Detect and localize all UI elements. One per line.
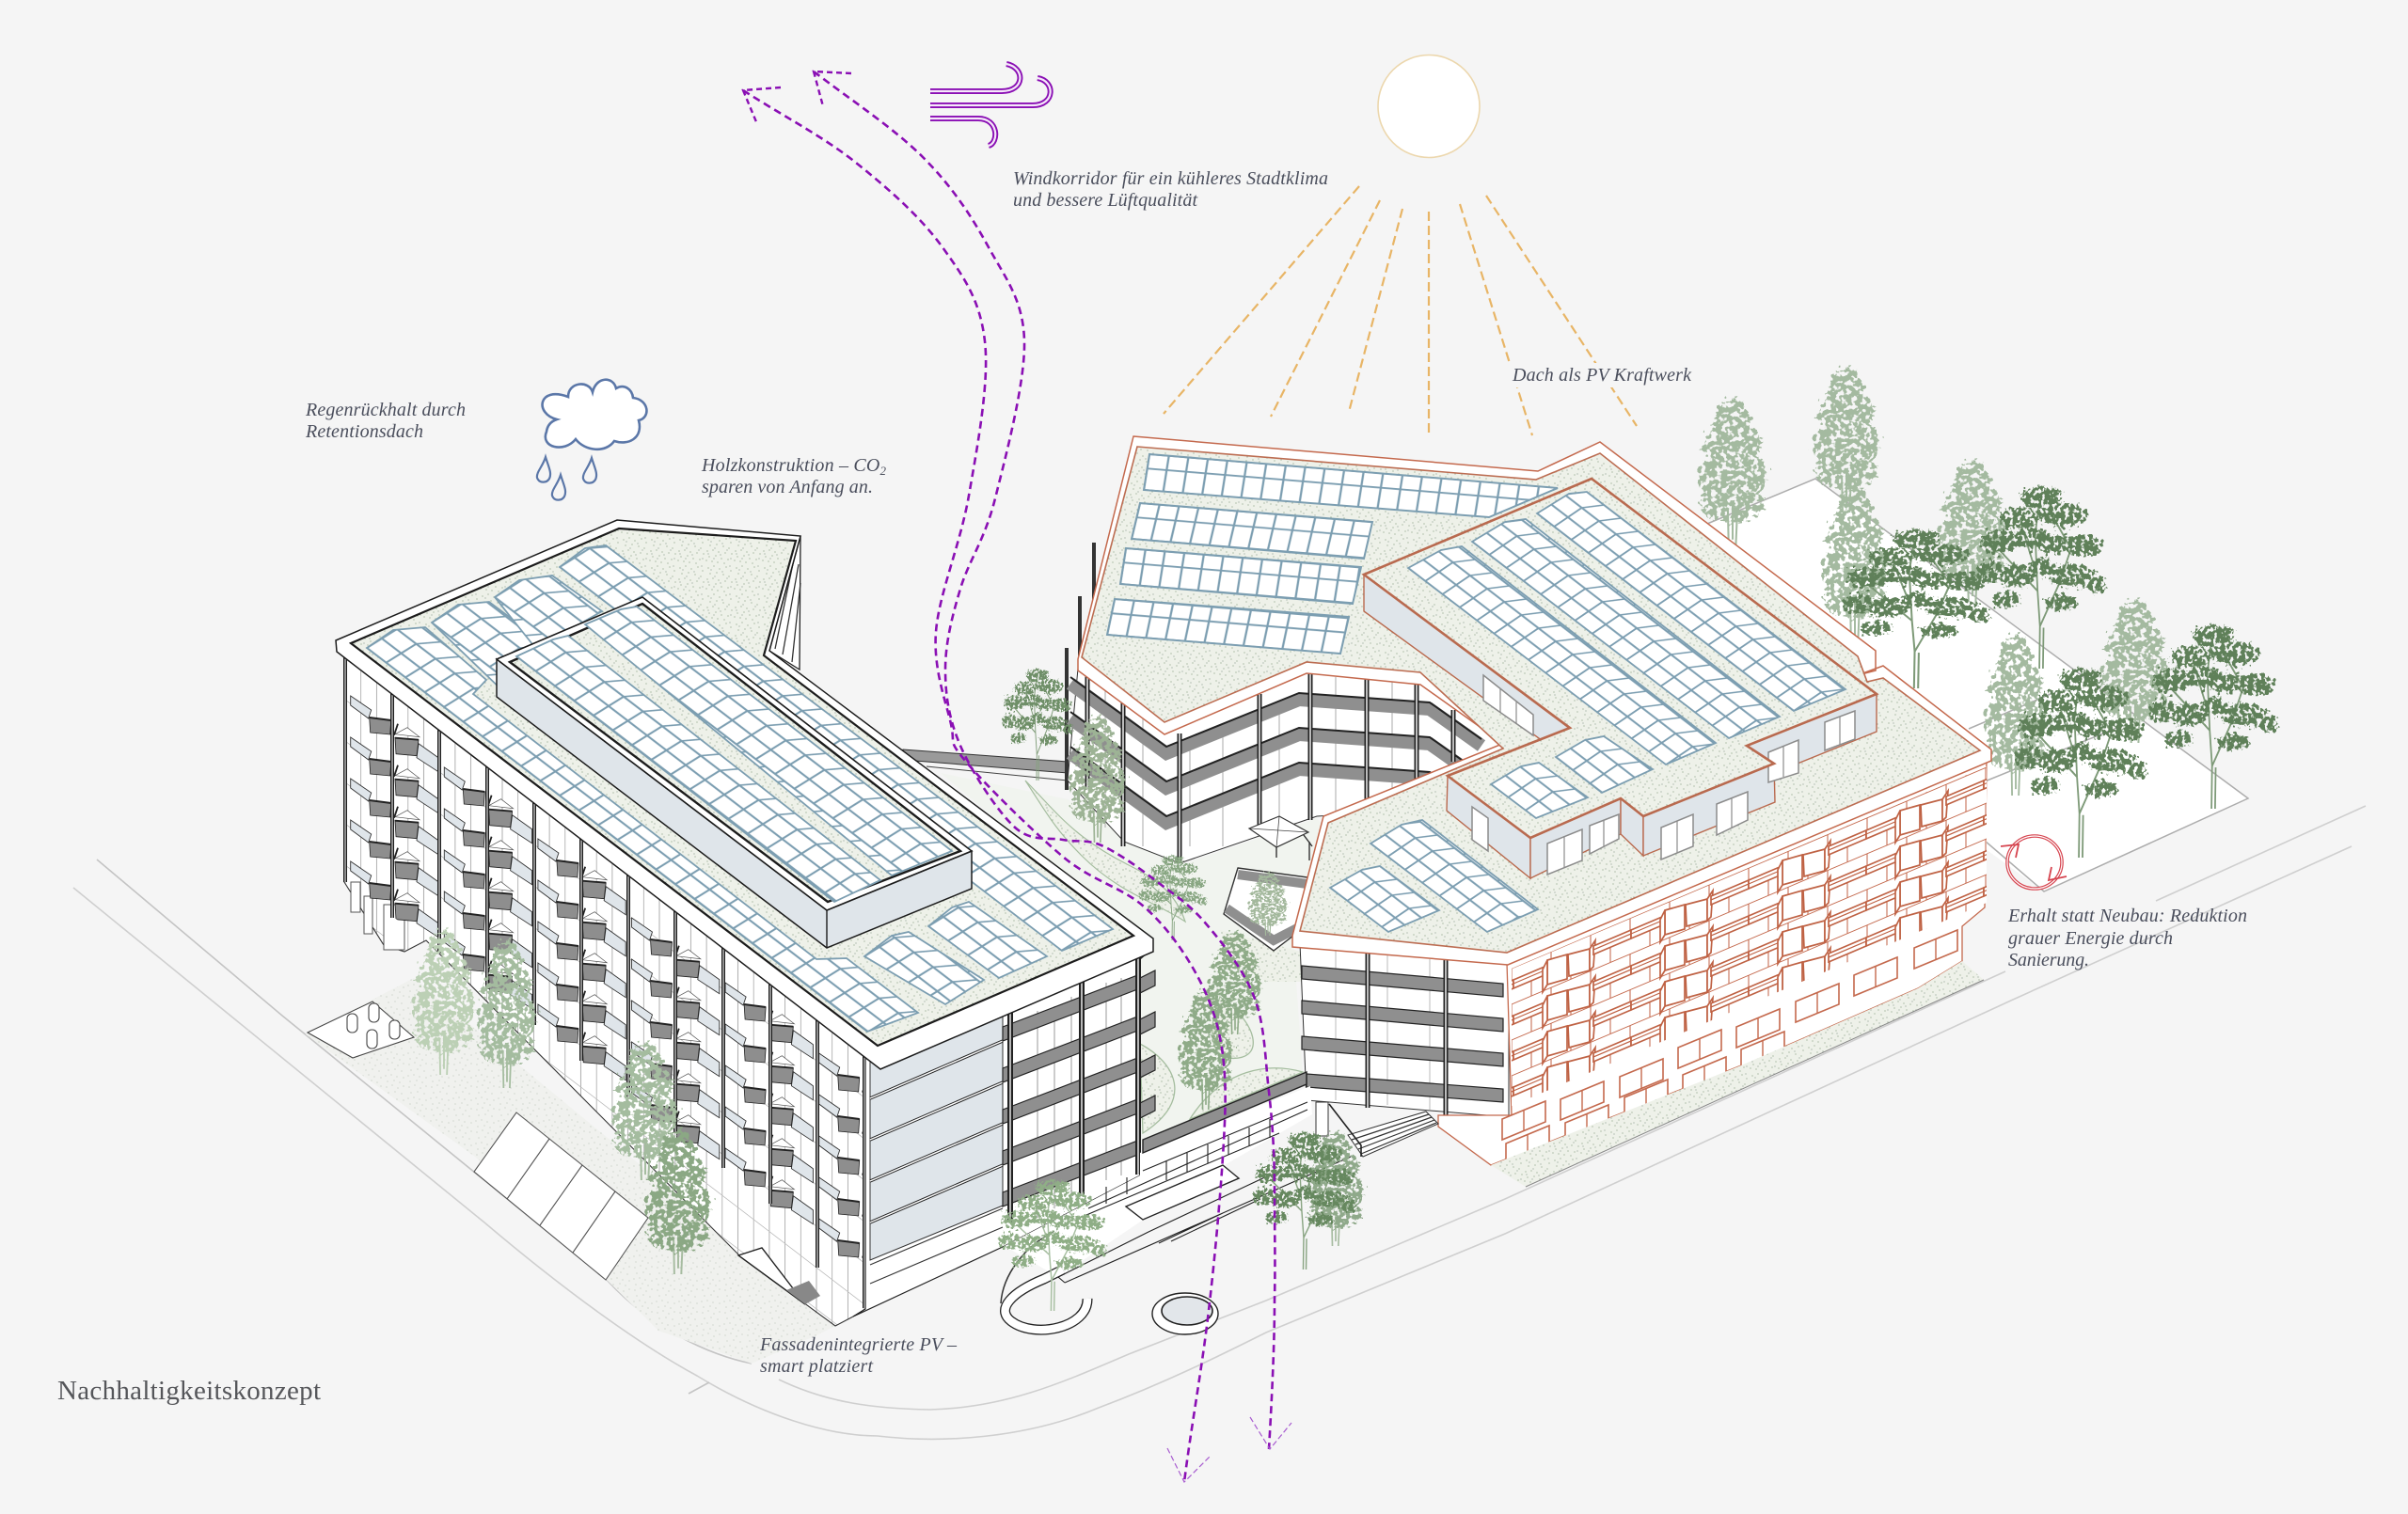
bin pad [308,1001,414,1058]
long southwest facade [344,651,865,1326]
label: facade PV: Fassadenintegrierte PV – [759,1334,958,1355]
courtyard facade [1068,662,1505,863]
courtyard ground and planting beds [941,773,1324,1145]
red facade [1438,757,1987,1165]
sun rays [1164,186,1637,437]
patio umbrella [1249,816,1312,860]
courtyard trees [1001,669,1262,1110]
roof slab outline [1078,436,1991,965]
pilotis [351,882,404,950]
penthouse windows [1472,675,1855,875]
connecting bridge [903,749,1068,781]
label: facade PV: smart platziert [760,1356,873,1377]
foreground trees [412,929,1365,1311]
penthouse roof [1364,479,1877,838]
label: rain retention [305,400,466,442]
parking bays [474,1112,648,1280]
icon: recycling circle [2001,836,2067,889]
label: retained building [2007,906,2247,970]
green roof surface [351,528,1133,1046]
terrace wall, ramps and stairs [1005,1072,1438,1283]
site plot behind the existing building [1707,479,2248,891]
retained building roof [1078,436,1991,965]
balconies [350,695,863,1258]
red windows [1502,930,1957,1164]
window mullions [1038,978,1121,1218]
title: Nachhaltigkeitskonzept [57,1376,321,1406]
courtyard poles [1087,658,1453,863]
label: rain retention: Regenrückhalt durch [305,400,466,420]
left site ground with parking and bins [306,978,835,1364]
roof slab [336,520,1153,1069]
back poles [1067,543,1094,790]
roof PV arrays [367,545,1113,1032]
icon: sun [1378,55,1480,158]
ground floor block [1300,943,1509,1117]
existing building facade and courtyard block [1067,543,2037,1187]
penthouse PV arrays [1330,492,1846,932]
rooftop block walls [497,659,972,948]
arrowheads [743,71,851,124]
label: wind corridor: und bessere Lüftqualität [1013,190,1197,211]
curved planter and round basin [1001,1232,1218,1334]
balcony bands [1070,684,1481,823]
label: retained building: grauer Energie durch [2008,928,2173,949]
label: retained building: Sanierung. [2008,950,2089,970]
wind path east [814,71,1275,1449]
trees behind right building [1698,367,2278,858]
label: timber construction [701,455,886,497]
icon: wind [930,64,1051,146]
label: timber construction: sparen von Anfang an. [702,477,873,497]
southeast facade PV panels [870,1002,1003,1260]
icon: rain cloud [537,380,646,500]
notch wall [769,536,800,670]
new timber building [336,520,1155,1326]
entrance [738,1248,820,1304]
speckled strip in front [1491,961,1984,1187]
street lines [73,806,2366,1439]
label: timber construction: 2 [880,464,886,478]
penthouse walls [1364,575,1877,878]
label: timber construction: Holzkonstruktion – CO [702,455,879,476]
rain drops [537,457,596,500]
red balconies [1450,755,2037,1133]
label: wind corridor [1013,168,1328,211]
planter with courtyard tree [1224,868,1307,951]
north wing PV arrays [1107,454,1558,654]
balcony strips [1003,970,1155,1206]
label: retained building: Erhalt statt Neubau: Reduktion [2007,906,2247,926]
facade columns [345,656,864,1308]
rooftop block top [497,597,972,910]
wind path west [743,90,1226,1482]
stairs [1348,1112,1438,1157]
label: PV roof: Dach als PV Kraftwerk [1512,365,1692,386]
label: rain retention: Retentionsdach [305,421,423,442]
label: wind corridor: Windkorridor für ein kühleres Stadtklima [1013,168,1328,189]
rooftop block PV arrays [516,607,952,902]
wind corridor arrows [743,71,1291,1482]
label: facade PV [759,1334,958,1377]
southeast facade [853,948,1153,1317]
green roof surface [1082,447,1980,953]
